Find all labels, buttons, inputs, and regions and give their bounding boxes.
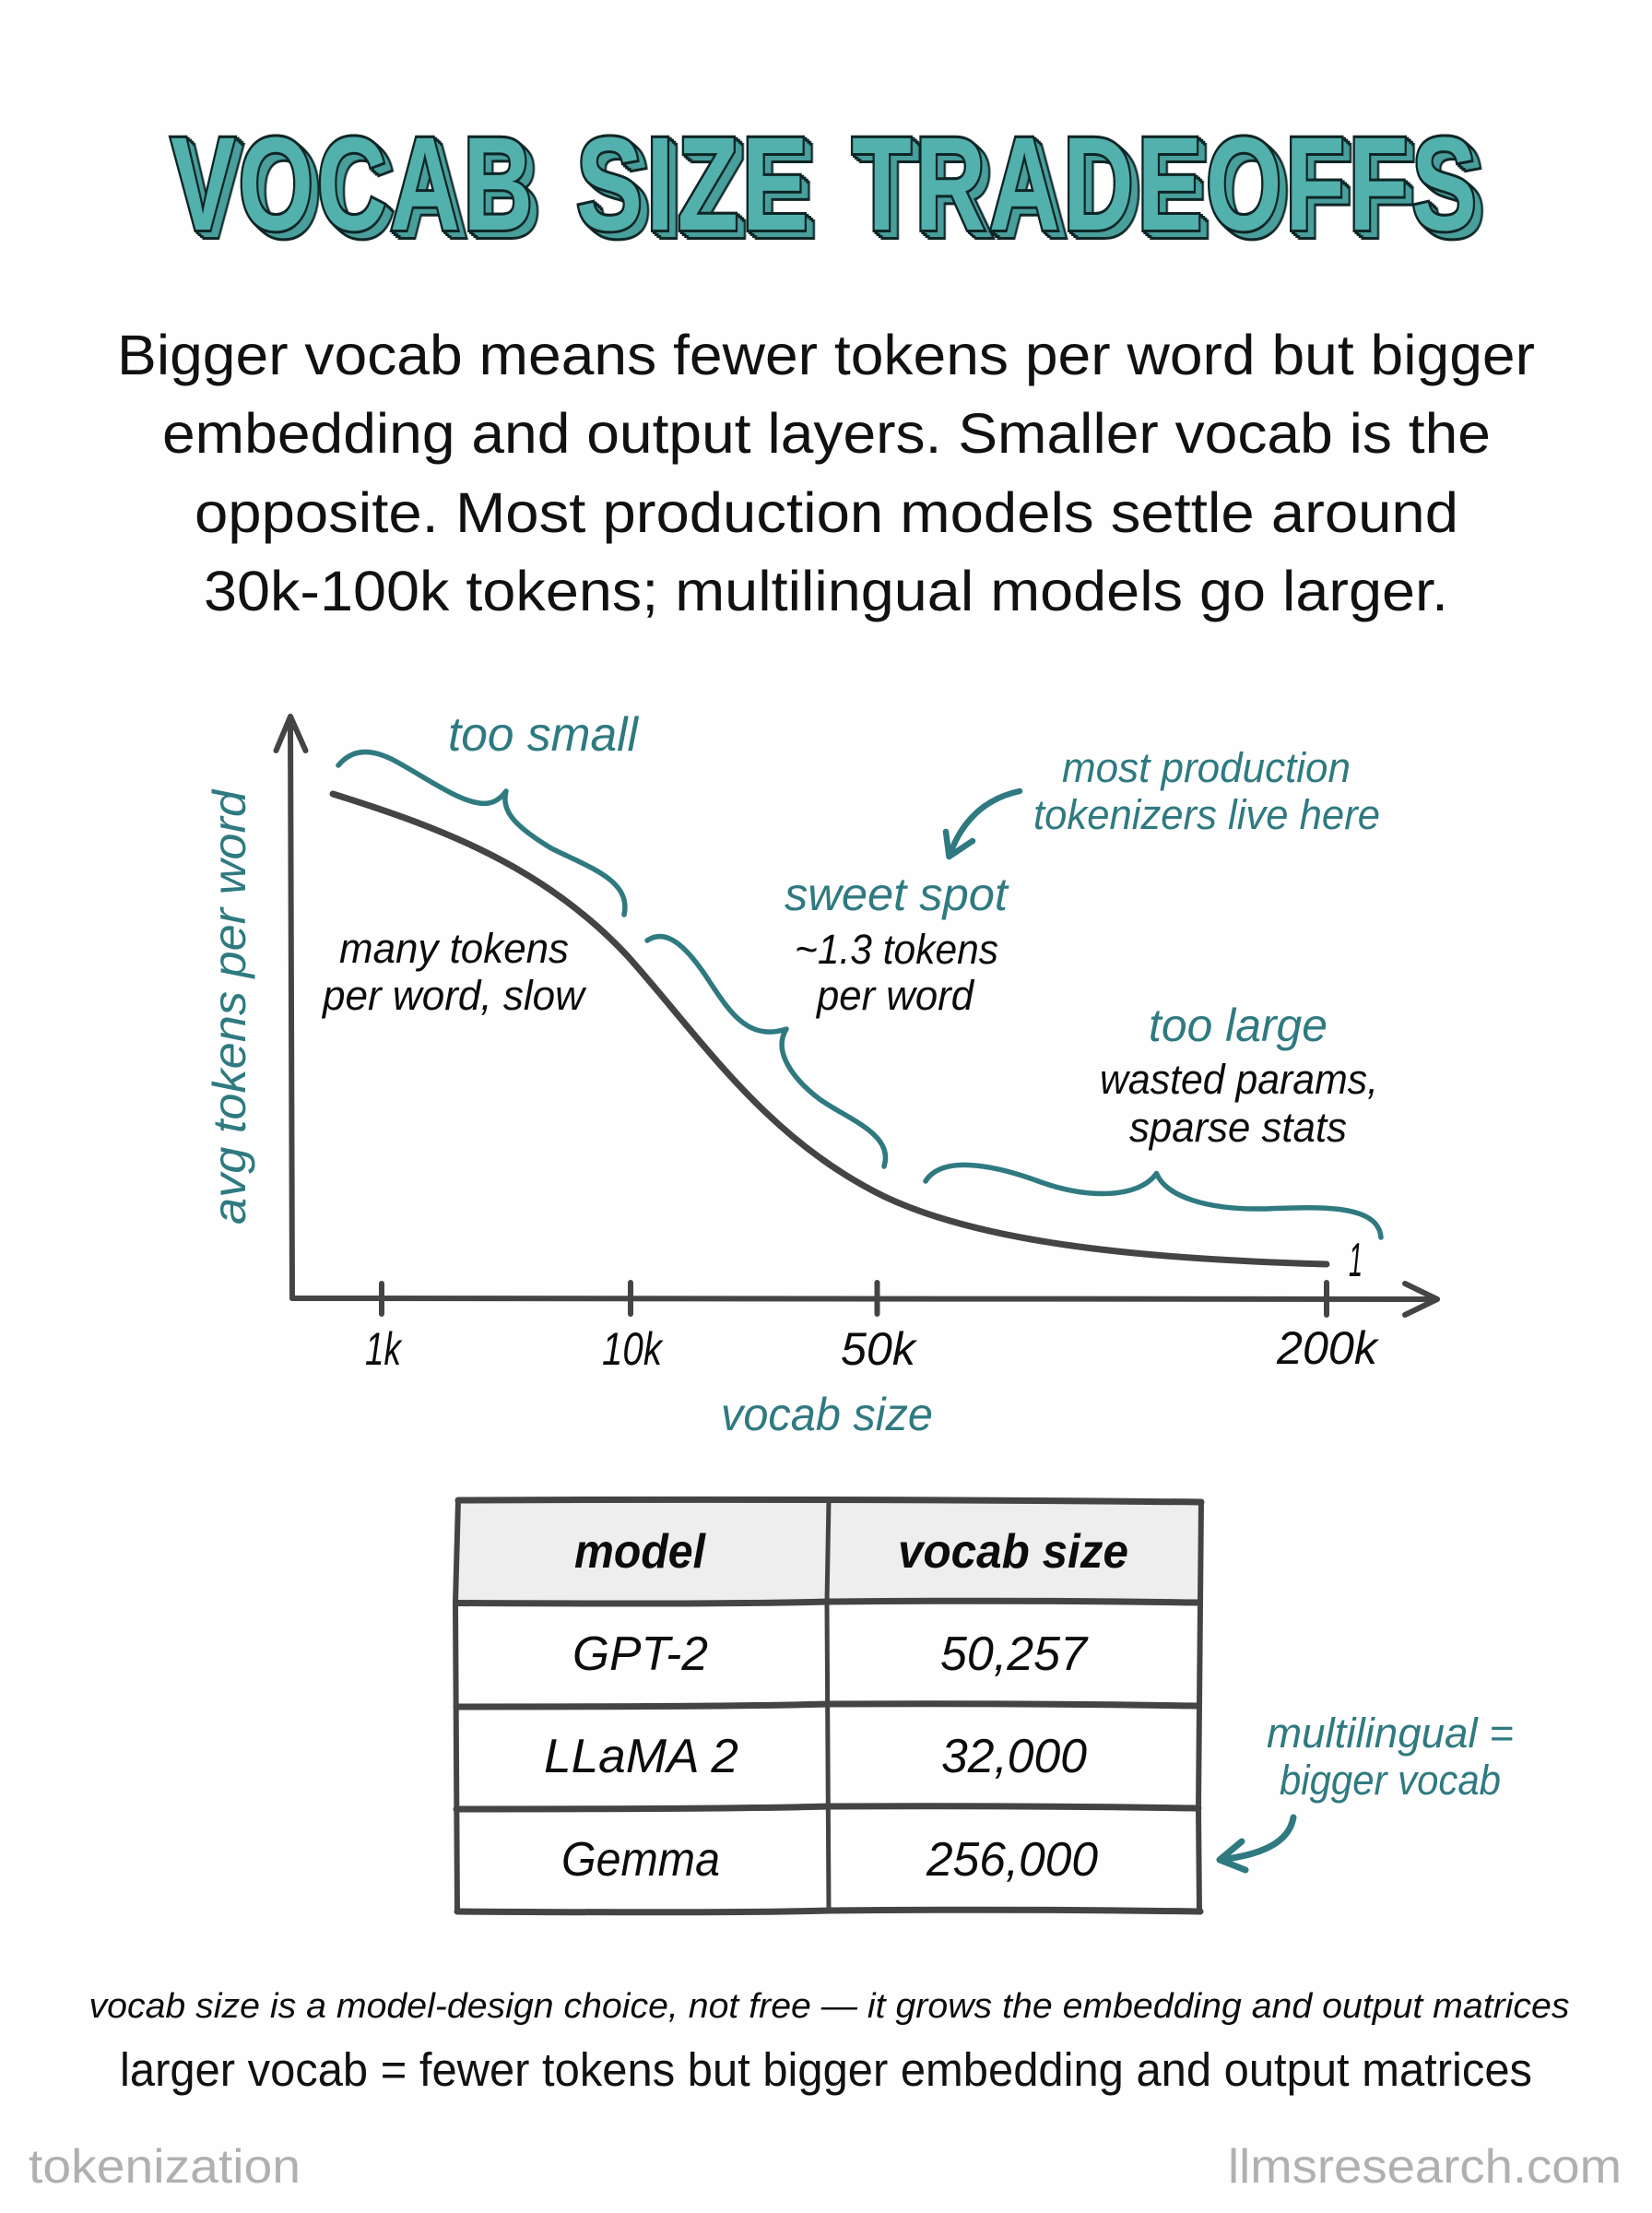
note: many tokens: many tokens — [339, 925, 569, 972]
x tick labels: 50k — [841, 1323, 918, 1375]
row: LLaMA 2 — [544, 1730, 1087, 1783]
intro paragraph: Bigger vocab means fewer tokens per word but bigger — [117, 324, 1535, 386]
x tick labels: 10k — [602, 1323, 664, 1375]
curve end value: 1 — [1349, 1234, 1363, 1287]
note: wasted params: sparse stats — [1129, 1104, 1347, 1151]
title: VOCAB — [171, 110, 537, 258]
panel: model vocab table — [455, 1499, 1201, 1912]
x axis arrow — [292, 1284, 1437, 1315]
row: Gemma — [561, 1833, 1098, 1887]
x axis label: vocab size — [721, 1389, 933, 1440]
note: tokens per word: ~1.3 tokens — [795, 926, 998, 973]
brace: too large — [926, 1165, 1381, 1237]
x tick labels: 1k — [365, 1323, 403, 1375]
row: GPT-2: GPT-2 — [572, 1627, 708, 1681]
table grid — [455, 1499, 1201, 1912]
summary line: larger vocab = fewer tokens but bigger embedding and output matrices — [120, 2043, 1532, 2096]
callout: multilingual: bigger vocab — [1280, 1757, 1501, 1804]
title: SIZE — [576, 110, 812, 258]
callout: most production tokenizers: tokenizers live here — [1033, 791, 1380, 838]
note: many tokens — [321, 925, 586, 1019]
y axis label: avg tokens per word — [204, 788, 255, 1225]
arrow: callout to sweet spot — [946, 791, 1020, 857]
x tick labels — [365, 1322, 1380, 1375]
note: many tokens: per word, slow — [321, 972, 586, 1019]
table header text: vocab size — [898, 1525, 1128, 1579]
footer left: tokenization — [29, 2140, 301, 2194]
panel: chart — [204, 708, 1437, 1440]
intro paragraph: 30k-100k tokens; multilingual models go larger. — [204, 560, 1448, 622]
intro paragraph — [117, 324, 1535, 622]
italic note: vocab size is a model-design choice, not free — it grows the embedding and output matrices — [88, 1987, 1569, 2026]
row: LLaMA 2: LLaMA 2 — [544, 1730, 738, 1783]
callout: most production tokenizers — [1033, 744, 1380, 838]
axis ticks — [382, 1283, 1327, 1315]
note: tokens per word: per word — [815, 972, 975, 1019]
callout: multilingual — [1267, 1710, 1514, 1804]
callout: most production tokenizers: most production — [1062, 744, 1351, 791]
row: GPT-2: 50,257 — [940, 1627, 1089, 1681]
arrow: callout to Gemma — [1220, 1817, 1293, 1870]
intro paragraph: embedding and output layers. Smaller vocab is the — [162, 402, 1491, 465]
row: LLaMA 2: 32,000 — [941, 1730, 1087, 1783]
footer right: llmsresearch.com — [1228, 2140, 1622, 2194]
brace: too small — [338, 752, 625, 915]
table header text — [574, 1525, 1128, 1579]
table header fill — [457, 1500, 1200, 1603]
y axis arrow — [277, 716, 306, 1298]
row: Gemma: 256,000 — [926, 1833, 1098, 1887]
row: GPT-2 — [572, 1627, 1089, 1681]
note: wasted params — [1100, 1056, 1378, 1151]
note: tokens per word — [795, 926, 998, 1019]
brace: sweet spot — [647, 937, 886, 1166]
label: sweet spot: sweet spot — [785, 869, 1009, 920]
callout: multilingual: multilingual = — [1267, 1710, 1514, 1757]
curve: tokens per word — [333, 794, 1327, 1264]
label: too small: too small — [448, 708, 639, 762]
title — [168, 110, 1484, 258]
table header text: model — [574, 1525, 706, 1579]
row: Gemma: Gemma — [561, 1833, 720, 1887]
label: too large: too large — [1149, 1000, 1328, 1051]
x tick labels: 200k — [1276, 1322, 1380, 1374]
intro paragraph: opposite. Most production models settle around — [195, 481, 1458, 544]
title: TRADEOFFS — [852, 110, 1481, 258]
note: wasted params: wasted params, — [1100, 1056, 1378, 1103]
